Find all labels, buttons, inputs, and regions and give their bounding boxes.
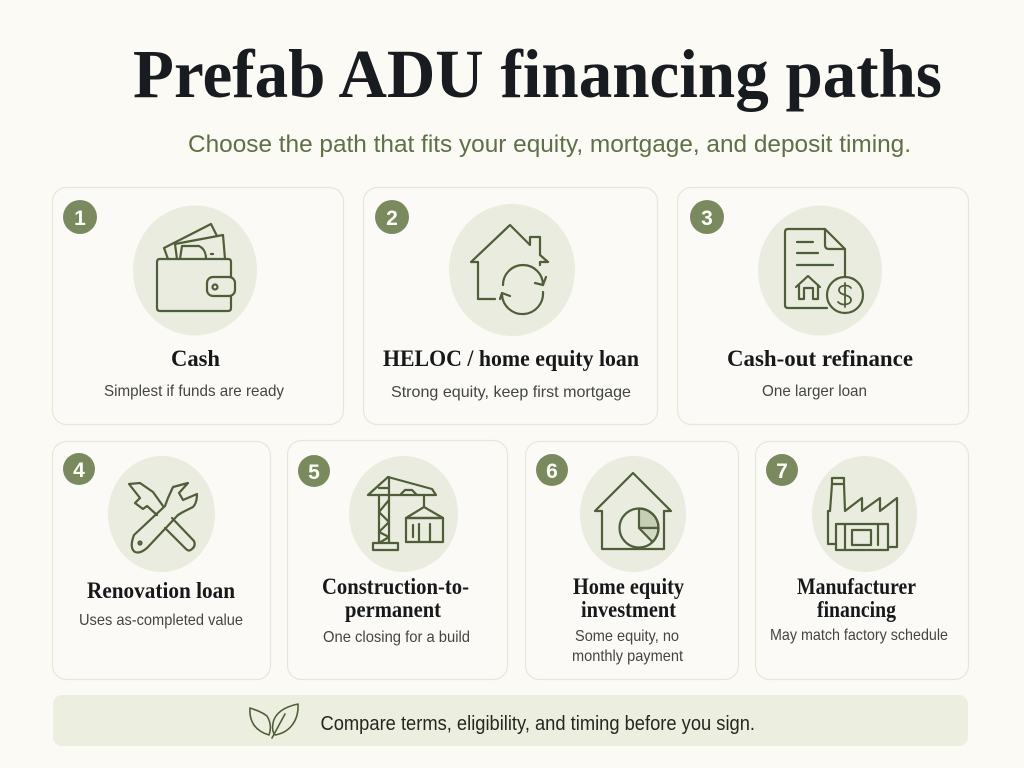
subtitle: Choose the path that fits your equity, mortgage, and deposit timing. xyxy=(188,131,911,158)
heading: manufacturer financing xyxy=(797,574,916,622)
text: cash note: Simplest if funds are ready xyxy=(104,383,284,400)
heading: cash: Cash xyxy=(171,346,220,371)
icon: house with pie chart xyxy=(595,473,671,549)
panel: heloc xyxy=(364,188,658,424)
heading: cash-out refinance: Cash-out refinance xyxy=(727,346,913,371)
heading: home equity investment xyxy=(573,574,684,622)
panel: cash-out refinance xyxy=(678,188,968,424)
badge 2 xyxy=(375,200,409,234)
text: investment note: Some equity, no xyxy=(575,628,679,645)
callout banner xyxy=(53,695,968,746)
text: manufacturer note: May match factory schedule xyxy=(770,627,948,644)
heading: manufacturer financing: financing xyxy=(817,597,896,622)
badge 7 xyxy=(766,454,798,486)
icon: leaves xyxy=(250,704,298,738)
panel: manufacturer financing xyxy=(756,442,968,680)
heading: home equity investment: Home equity xyxy=(573,574,684,599)
text: heloc note: Strong equity, keep first mortgage xyxy=(391,384,631,401)
text: investment note xyxy=(572,628,683,665)
badge 6 xyxy=(536,454,568,486)
title: Prefab ADU financing paths xyxy=(133,36,942,112)
badge 4 xyxy=(63,453,95,485)
icon: crane with module xyxy=(368,477,443,550)
heading: renovation loan: Renovation loan xyxy=(87,578,235,603)
icon: wallet xyxy=(157,224,235,311)
heading: construction-to-permanent: permanent xyxy=(345,597,441,622)
text: renovation note: Uses as-completed value xyxy=(79,612,243,629)
badge 5 xyxy=(298,455,330,487)
heading: heloc: HELOC / home equity loan xyxy=(383,346,639,371)
badge 1: 1 xyxy=(74,207,86,230)
text: investment note: monthly payment xyxy=(572,648,683,665)
badge 7: 7 xyxy=(776,460,788,483)
badge 2: 2 xyxy=(386,207,398,230)
panel: home equity investment xyxy=(526,442,738,680)
text: callout message: Compare terms, eligibility, and timing before you sign. xyxy=(320,713,755,735)
text: refinance note: One larger loan xyxy=(762,383,867,400)
badge 1 xyxy=(63,200,97,234)
icon: house with refresh arrows xyxy=(471,225,548,314)
badge 3: 3 xyxy=(701,207,713,230)
text: construction note: One closing for a build xyxy=(323,629,470,646)
icon: crossed tools xyxy=(129,483,197,552)
heading: home equity investment: investment xyxy=(581,597,676,622)
badge 5: 5 xyxy=(308,461,320,484)
badge 4: 4 xyxy=(73,459,85,482)
panel: renovation loan xyxy=(52,442,270,680)
heading: manufacturer financing: Manufacturer xyxy=(797,574,916,599)
panel: cash xyxy=(52,188,344,424)
panel: construction-to-permanent xyxy=(288,440,508,680)
icon: document with coin xyxy=(785,229,863,313)
heading: construction-to-permanent xyxy=(322,574,469,622)
heading: construction-to-permanent: Construction-to- xyxy=(322,574,469,599)
badge 3 xyxy=(690,200,724,234)
icon: factory xyxy=(828,478,897,550)
badge 6: 6 xyxy=(546,460,558,483)
